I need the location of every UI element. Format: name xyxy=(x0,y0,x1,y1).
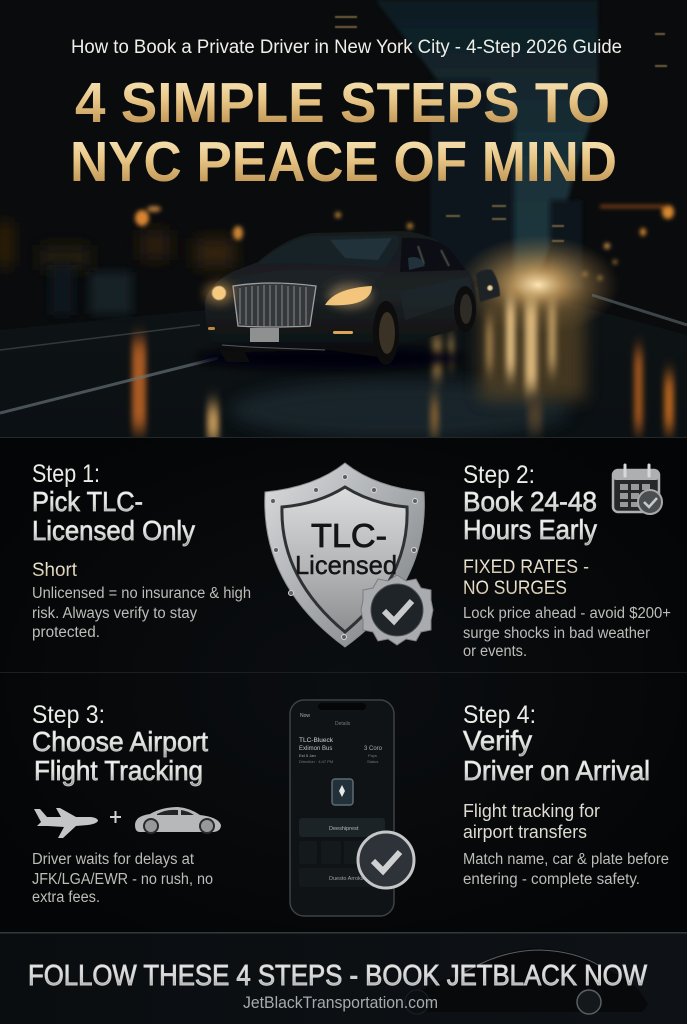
step 4 subheading: Flight tracking for xyxy=(463,801,600,821)
phone: app header text xyxy=(299,713,383,764)
footer background xyxy=(0,933,687,1024)
phone: app header text: 3 Coro xyxy=(364,746,383,752)
icon: plus xyxy=(110,811,121,823)
step 3 label: Step 3: xyxy=(32,701,105,729)
reflections: center streaks xyxy=(432,300,556,390)
step 1 heading xyxy=(32,486,195,546)
step 2 heading: Hours Early xyxy=(463,514,597,545)
panel: step 4 xyxy=(463,701,669,888)
step 2 heading: Book 24-48 xyxy=(463,486,597,517)
step 4 heading: Driver on Arrival xyxy=(463,755,650,786)
row divider xyxy=(0,672,687,673)
car: front bumper trim xyxy=(222,345,325,350)
car: right headlight xyxy=(325,286,372,305)
step 3 body: Driver waits for delays at xyxy=(32,851,195,868)
step 4 heading: Verify xyxy=(463,725,532,756)
car: side panel highlight xyxy=(400,276,472,320)
step 1 body: risk. Always verify to stay xyxy=(32,605,197,622)
phone: app header text: Direction · 4:47 PM xyxy=(299,759,333,764)
step 1 body xyxy=(32,585,251,641)
step 1 subheading: Short xyxy=(32,560,78,581)
shield: TLC text: TLC- xyxy=(311,517,387,554)
phone: stat tiles xyxy=(299,841,364,864)
step 2 body: Lock price ahead - avoid $200+ xyxy=(463,605,671,622)
car: window highlights xyxy=(418,246,449,266)
phone: app header text: Est 5 Jan xyxy=(299,753,316,758)
shield: rivets xyxy=(270,474,418,640)
icon: smartphone with booking app xyxy=(290,700,414,916)
phone: bottom label: Duesto Arroks xyxy=(329,876,364,882)
icon: calendar with check xyxy=(613,465,662,514)
car: license plate xyxy=(250,328,279,342)
hero: teal sky gap between towers xyxy=(375,0,598,290)
hero: left ground-floor glow xyxy=(0,222,235,270)
car: shadow xyxy=(195,346,465,370)
step 3 body xyxy=(32,851,213,906)
car: front wheel xyxy=(373,301,399,365)
hero: headlight glow in distance xyxy=(466,238,616,326)
car: body xyxy=(205,231,476,358)
shield: check badge xyxy=(361,575,433,645)
phone: bottom row xyxy=(299,868,385,887)
step 1 label: Step 1: xyxy=(32,460,100,488)
icon: TLC-Licensed shield xyxy=(265,463,433,647)
panel: step 1 xyxy=(32,460,251,641)
step 4 body xyxy=(463,851,669,888)
hero: lit windows xyxy=(335,16,667,242)
hero: blurred pedestrians xyxy=(50,265,132,315)
hero: base dark xyxy=(0,0,687,437)
hero: limousine xyxy=(195,231,476,370)
footer divider xyxy=(0,932,687,934)
car: windscreen xyxy=(271,235,400,261)
step 2 label: Step 2: xyxy=(463,461,535,489)
step 4 subheading xyxy=(463,801,600,842)
panel: hero night street photo xyxy=(0,0,687,440)
step 2 body xyxy=(463,605,671,660)
panel: footer call to action xyxy=(0,933,687,1024)
shield: metal rim xyxy=(265,463,424,647)
hero: mid towers xyxy=(430,80,582,290)
car: hood highlight xyxy=(232,270,385,288)
phone: app header text: Exlimon Bus xyxy=(299,746,332,752)
car: grille xyxy=(233,283,316,327)
icon: car side view xyxy=(135,807,221,833)
title line 2: NYC PEACE OF MIND xyxy=(70,130,617,194)
step 2 subheading: FIXED RATES - xyxy=(463,557,589,578)
car: left headlight xyxy=(212,286,226,300)
hero: street lamps xyxy=(135,205,674,280)
phone: check badge xyxy=(358,832,414,888)
panel: step 3 xyxy=(32,701,221,906)
phone: action bar label: Deeshiprest xyxy=(329,826,359,832)
step 3 body: JFK/LGA/EWR - no rush, no xyxy=(32,871,213,888)
hero: lane markings xyxy=(0,295,687,413)
step 1 body: protected. xyxy=(32,624,100,641)
footer: faint car xyxy=(405,948,648,1014)
hero: other cars behind xyxy=(476,270,500,302)
phone: app header text: Status xyxy=(367,759,378,764)
panel: steps background xyxy=(0,438,687,932)
car: side mirror xyxy=(408,257,425,270)
phone: center glowing tile xyxy=(332,779,353,805)
step 2 subheading xyxy=(463,557,589,599)
phone: app header text: Details xyxy=(335,721,351,727)
step 4 heading xyxy=(463,725,650,786)
panel: step 2 xyxy=(463,461,671,660)
step 3 heading: Flight Tracking xyxy=(34,755,203,786)
step 3 heading: Choose Airport xyxy=(32,726,208,757)
step 4 label: Step 4: xyxy=(463,701,536,729)
reflections: orange side streaks xyxy=(132,340,674,440)
phone: app header text: TLC-Blueck xyxy=(299,737,334,744)
step 1 heading: Pick TLC- xyxy=(32,486,143,517)
reflections: center warm pool xyxy=(480,305,585,400)
step 1 body: Unlicensed = no insurance & high xyxy=(32,585,251,602)
footer website: JetBlackTransportation.com xyxy=(243,993,438,1012)
hero: teal wet road sheen xyxy=(230,380,570,440)
phone: app header text: Pays xyxy=(368,753,377,758)
step 4 body: Match name, car & plate before xyxy=(463,851,669,868)
title xyxy=(70,71,617,194)
phone: center glyph xyxy=(339,785,345,797)
divider under hero xyxy=(0,437,687,438)
step 3 heading xyxy=(32,726,208,786)
car: windscreen reflection xyxy=(330,238,392,260)
hero: road xyxy=(2,310,683,334)
hero: road reflections xyxy=(132,300,674,440)
step 2 body: surge shocks in bad weather xyxy=(463,625,650,642)
car: fog lights xyxy=(333,331,353,334)
step 4 body: entering - complete safety. xyxy=(463,871,640,888)
car: rear wheel xyxy=(454,286,476,332)
car: front lower wheel xyxy=(218,348,250,362)
step 2 body: or events. xyxy=(463,643,527,660)
shield: Licensed text: Licensed xyxy=(295,550,397,580)
step 2 heading xyxy=(463,486,597,545)
phone: action bar xyxy=(299,818,385,837)
phone: app header text: Now xyxy=(300,713,310,719)
title line 1: 4 SIMPLE STEPS TO xyxy=(75,71,610,135)
step 2 subheading: NO SURGES xyxy=(463,578,567,599)
subtitle: How to Book a Private Driver in New York City - 4-Step 2026 Guide xyxy=(71,37,622,58)
step 3 body: extra fees. xyxy=(32,889,100,906)
shield: inner face xyxy=(282,487,407,632)
phone: notch xyxy=(318,703,366,710)
icon: airplane xyxy=(34,808,98,838)
phone: body xyxy=(290,700,394,916)
car: side windows xyxy=(400,238,466,272)
step 4 subheading: airport transfers xyxy=(463,822,587,842)
step 1 heading: Licensed Only xyxy=(32,515,195,546)
